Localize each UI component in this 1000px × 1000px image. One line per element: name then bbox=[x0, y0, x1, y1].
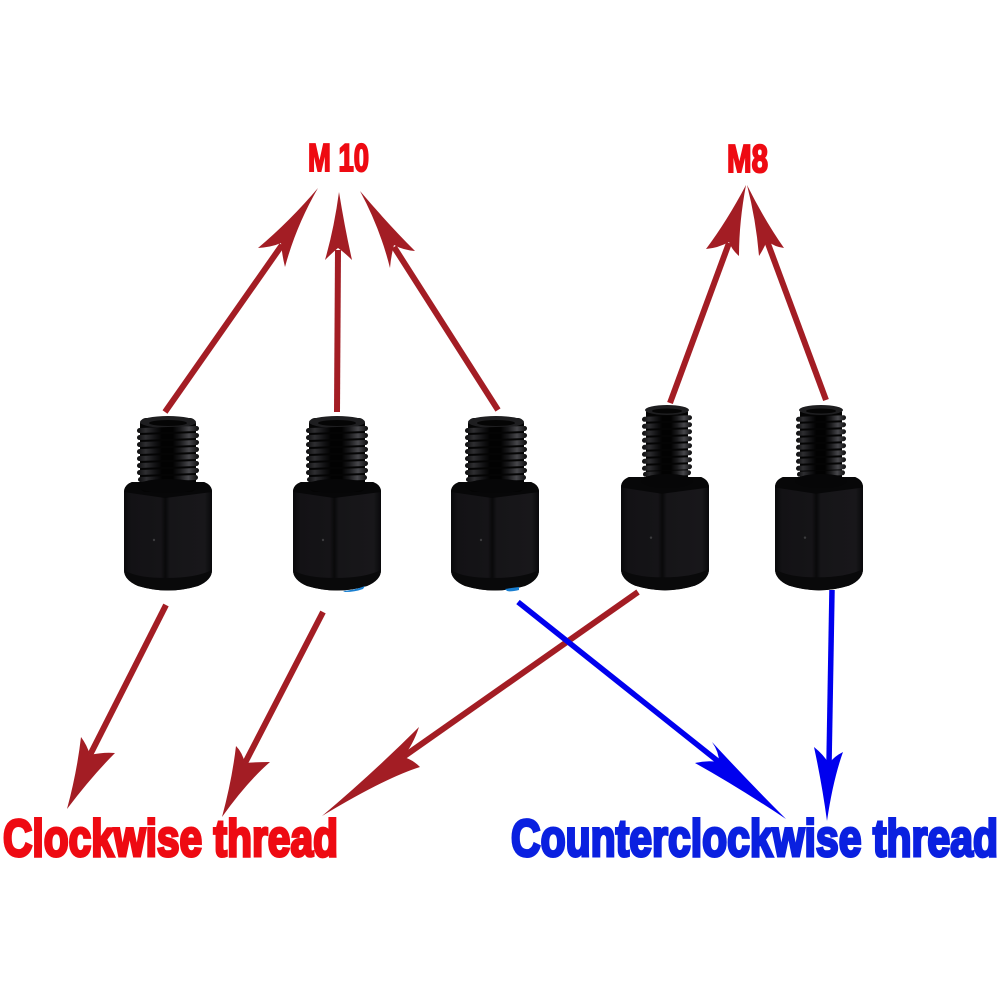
label: clockwise thread: Clockwise thread bbox=[3, 810, 338, 868]
bolt 5: M8 counterclockwise bbox=[775, 405, 863, 590]
arrow: bolt 2 to M 10 bbox=[325, 192, 352, 412]
arrow: bolt 2 to clockwise thread bbox=[222, 612, 323, 817]
bolt 1: M10 clockwise bbox=[124, 416, 212, 590]
arrow: bolt 5 to M8 bbox=[747, 185, 826, 400]
arrow: bolt 3 to M 10 bbox=[360, 191, 498, 410]
arrow: bolt 1 to clockwise thread bbox=[67, 605, 166, 809]
bolt 3: M10 counterclockwise bbox=[451, 416, 539, 591]
arrow: bolt 4 to clockwise thread bbox=[322, 592, 638, 816]
bolt 4: M8 clockwise bbox=[621, 405, 709, 590]
arrow: bolt 4 to M8 bbox=[670, 185, 746, 403]
arrow: bolt 3 to counterclockwise thread bbox=[518, 602, 786, 819]
arrow: bolt 5 to counterclockwise thread bbox=[814, 590, 843, 821]
label: M 10: M 10 bbox=[308, 137, 369, 180]
label: M8: M8 bbox=[727, 138, 768, 181]
arrow: bolt 1 to M 10 bbox=[165, 188, 318, 412]
bolt 2: M10 clockwise bbox=[293, 416, 381, 592]
